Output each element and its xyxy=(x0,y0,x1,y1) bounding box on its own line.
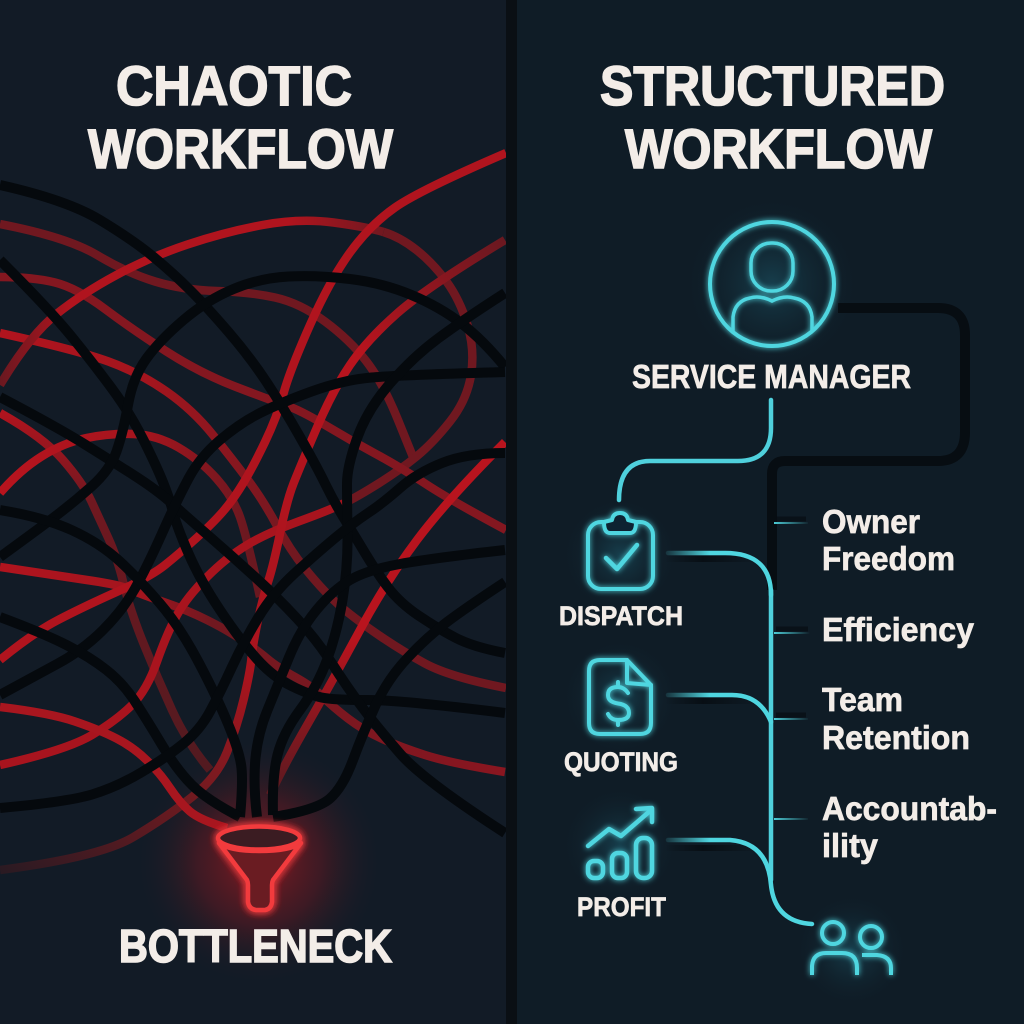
outcome: team retention: Team xyxy=(822,681,903,718)
outcome: team retention: Retention xyxy=(822,719,970,756)
divider xyxy=(506,0,517,1024)
outcome: owner freedom xyxy=(822,503,955,577)
tangled black lines xyxy=(0,185,505,833)
outcome: efficiency: Efficiency xyxy=(822,611,975,648)
funnel glow xyxy=(120,730,400,990)
outcome: team retention xyxy=(822,681,970,756)
title: structured workflow: WORKFLOW xyxy=(625,117,932,180)
label: quoting: QUOTING xyxy=(564,747,678,777)
outcome branch ticks xyxy=(774,519,810,819)
outcome: owner freedom: Freedom xyxy=(822,540,955,577)
title: structured workflow xyxy=(600,54,945,180)
label: profit: PROFIT xyxy=(577,892,666,922)
panel: chaotic workflow xyxy=(0,0,507,1024)
connector shadows xyxy=(665,559,760,848)
outcome: accountability: Accountab- xyxy=(822,790,997,827)
icon: service manager xyxy=(710,222,834,346)
icon: glowing funnel xyxy=(218,826,301,910)
outcome: accountability: ility xyxy=(822,827,879,864)
title: structured workflow: STRUCTURED xyxy=(600,54,945,117)
icon: team xyxy=(812,922,891,975)
title: chaotic workflow: WORKFLOW xyxy=(88,117,393,180)
outcome: accountability xyxy=(822,790,997,864)
dark bracket connector xyxy=(772,308,965,590)
line: dispatch xyxy=(668,553,771,595)
outcome labels xyxy=(822,503,997,864)
icon: profit chart xyxy=(588,808,652,878)
icon: quoting document xyxy=(589,660,651,734)
cyan flow lines xyxy=(619,400,812,924)
title: chaotic workflow: CHAOTIC xyxy=(116,54,352,117)
outcome: owner freedom: Owner xyxy=(822,503,920,540)
tangled red lines xyxy=(0,153,506,870)
icon glows xyxy=(560,192,910,1008)
line: manager to dispatch xyxy=(619,400,771,500)
title: chaotic workflow xyxy=(88,54,393,180)
line: quoting xyxy=(668,695,771,722)
panel: structured workflow xyxy=(517,0,1024,1024)
label: service manager: SERVICE MANAGER xyxy=(632,358,911,395)
line: profit to team xyxy=(668,840,812,924)
label: bottleneck: BOTTLENECK xyxy=(119,920,392,972)
main vertical line xyxy=(769,590,773,880)
label: dispatch: DISPATCH xyxy=(559,601,683,631)
icon: dispatch clipboard xyxy=(588,513,653,589)
